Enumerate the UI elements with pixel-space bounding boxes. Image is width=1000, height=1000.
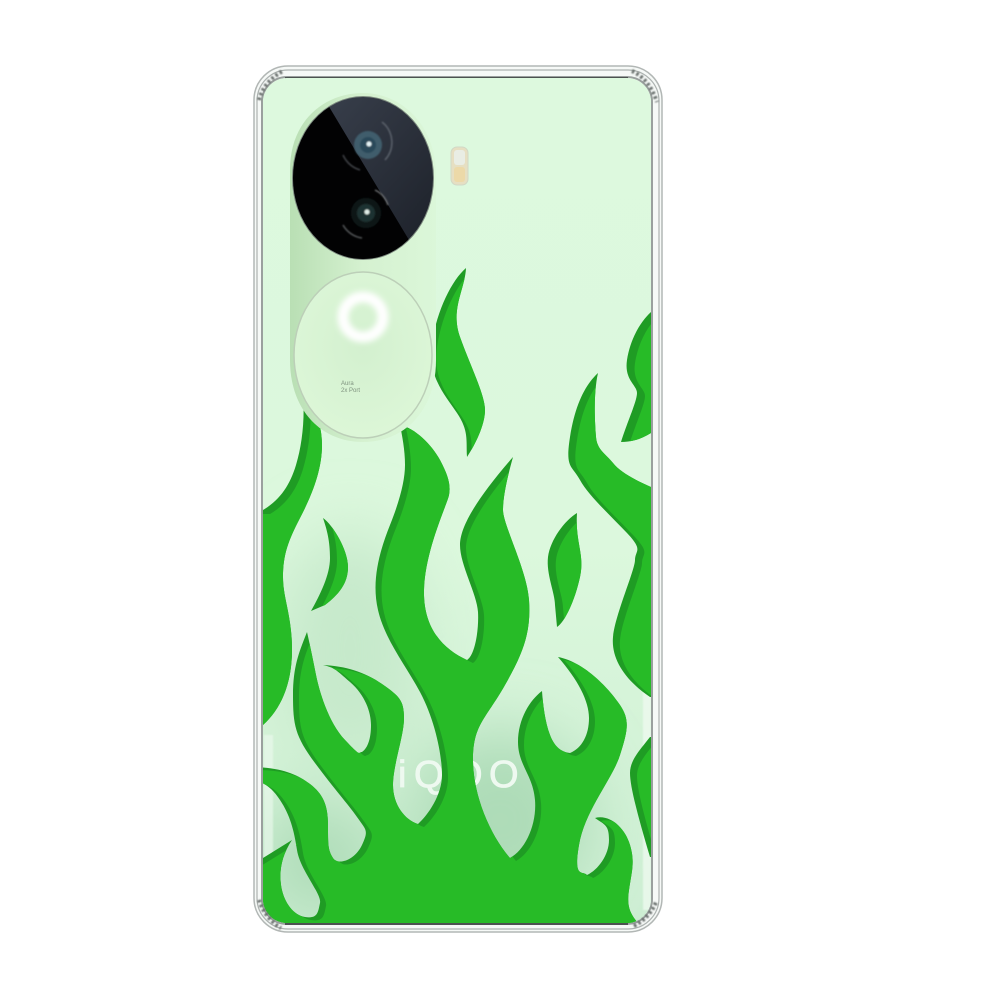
camera island [285, 93, 440, 442]
lens: upper [343, 122, 392, 170]
lens: lower [343, 190, 388, 238]
flames [250, 268, 668, 929]
soft shading [260, 530, 590, 920]
light ring [343, 297, 383, 337]
flash [451, 147, 468, 185]
flame: main mass [250, 425, 646, 929]
case corner reinforcements [259, 71, 657, 928]
camera lens housing [292, 96, 434, 260]
phone back panel [250, 78, 668, 929]
flame: left [263, 410, 322, 725]
iQOO logo: iQOO [398, 754, 519, 796]
edge highlights [264, 620, 651, 910]
flame: lower right [630, 737, 651, 857]
flame: centre leaf [548, 513, 582, 627]
flame: right [568, 373, 651, 697]
flame: small leaf left [311, 518, 348, 611]
phone case illustration [253, 65, 663, 933]
aura light oval: 2x Port [341, 388, 360, 394]
flame: top right [621, 312, 651, 442]
flame: top leaf [434, 268, 485, 457]
aura light oval [294, 272, 432, 438]
oval text: Aura [341, 381, 354, 387]
case frame [254, 66, 662, 932]
